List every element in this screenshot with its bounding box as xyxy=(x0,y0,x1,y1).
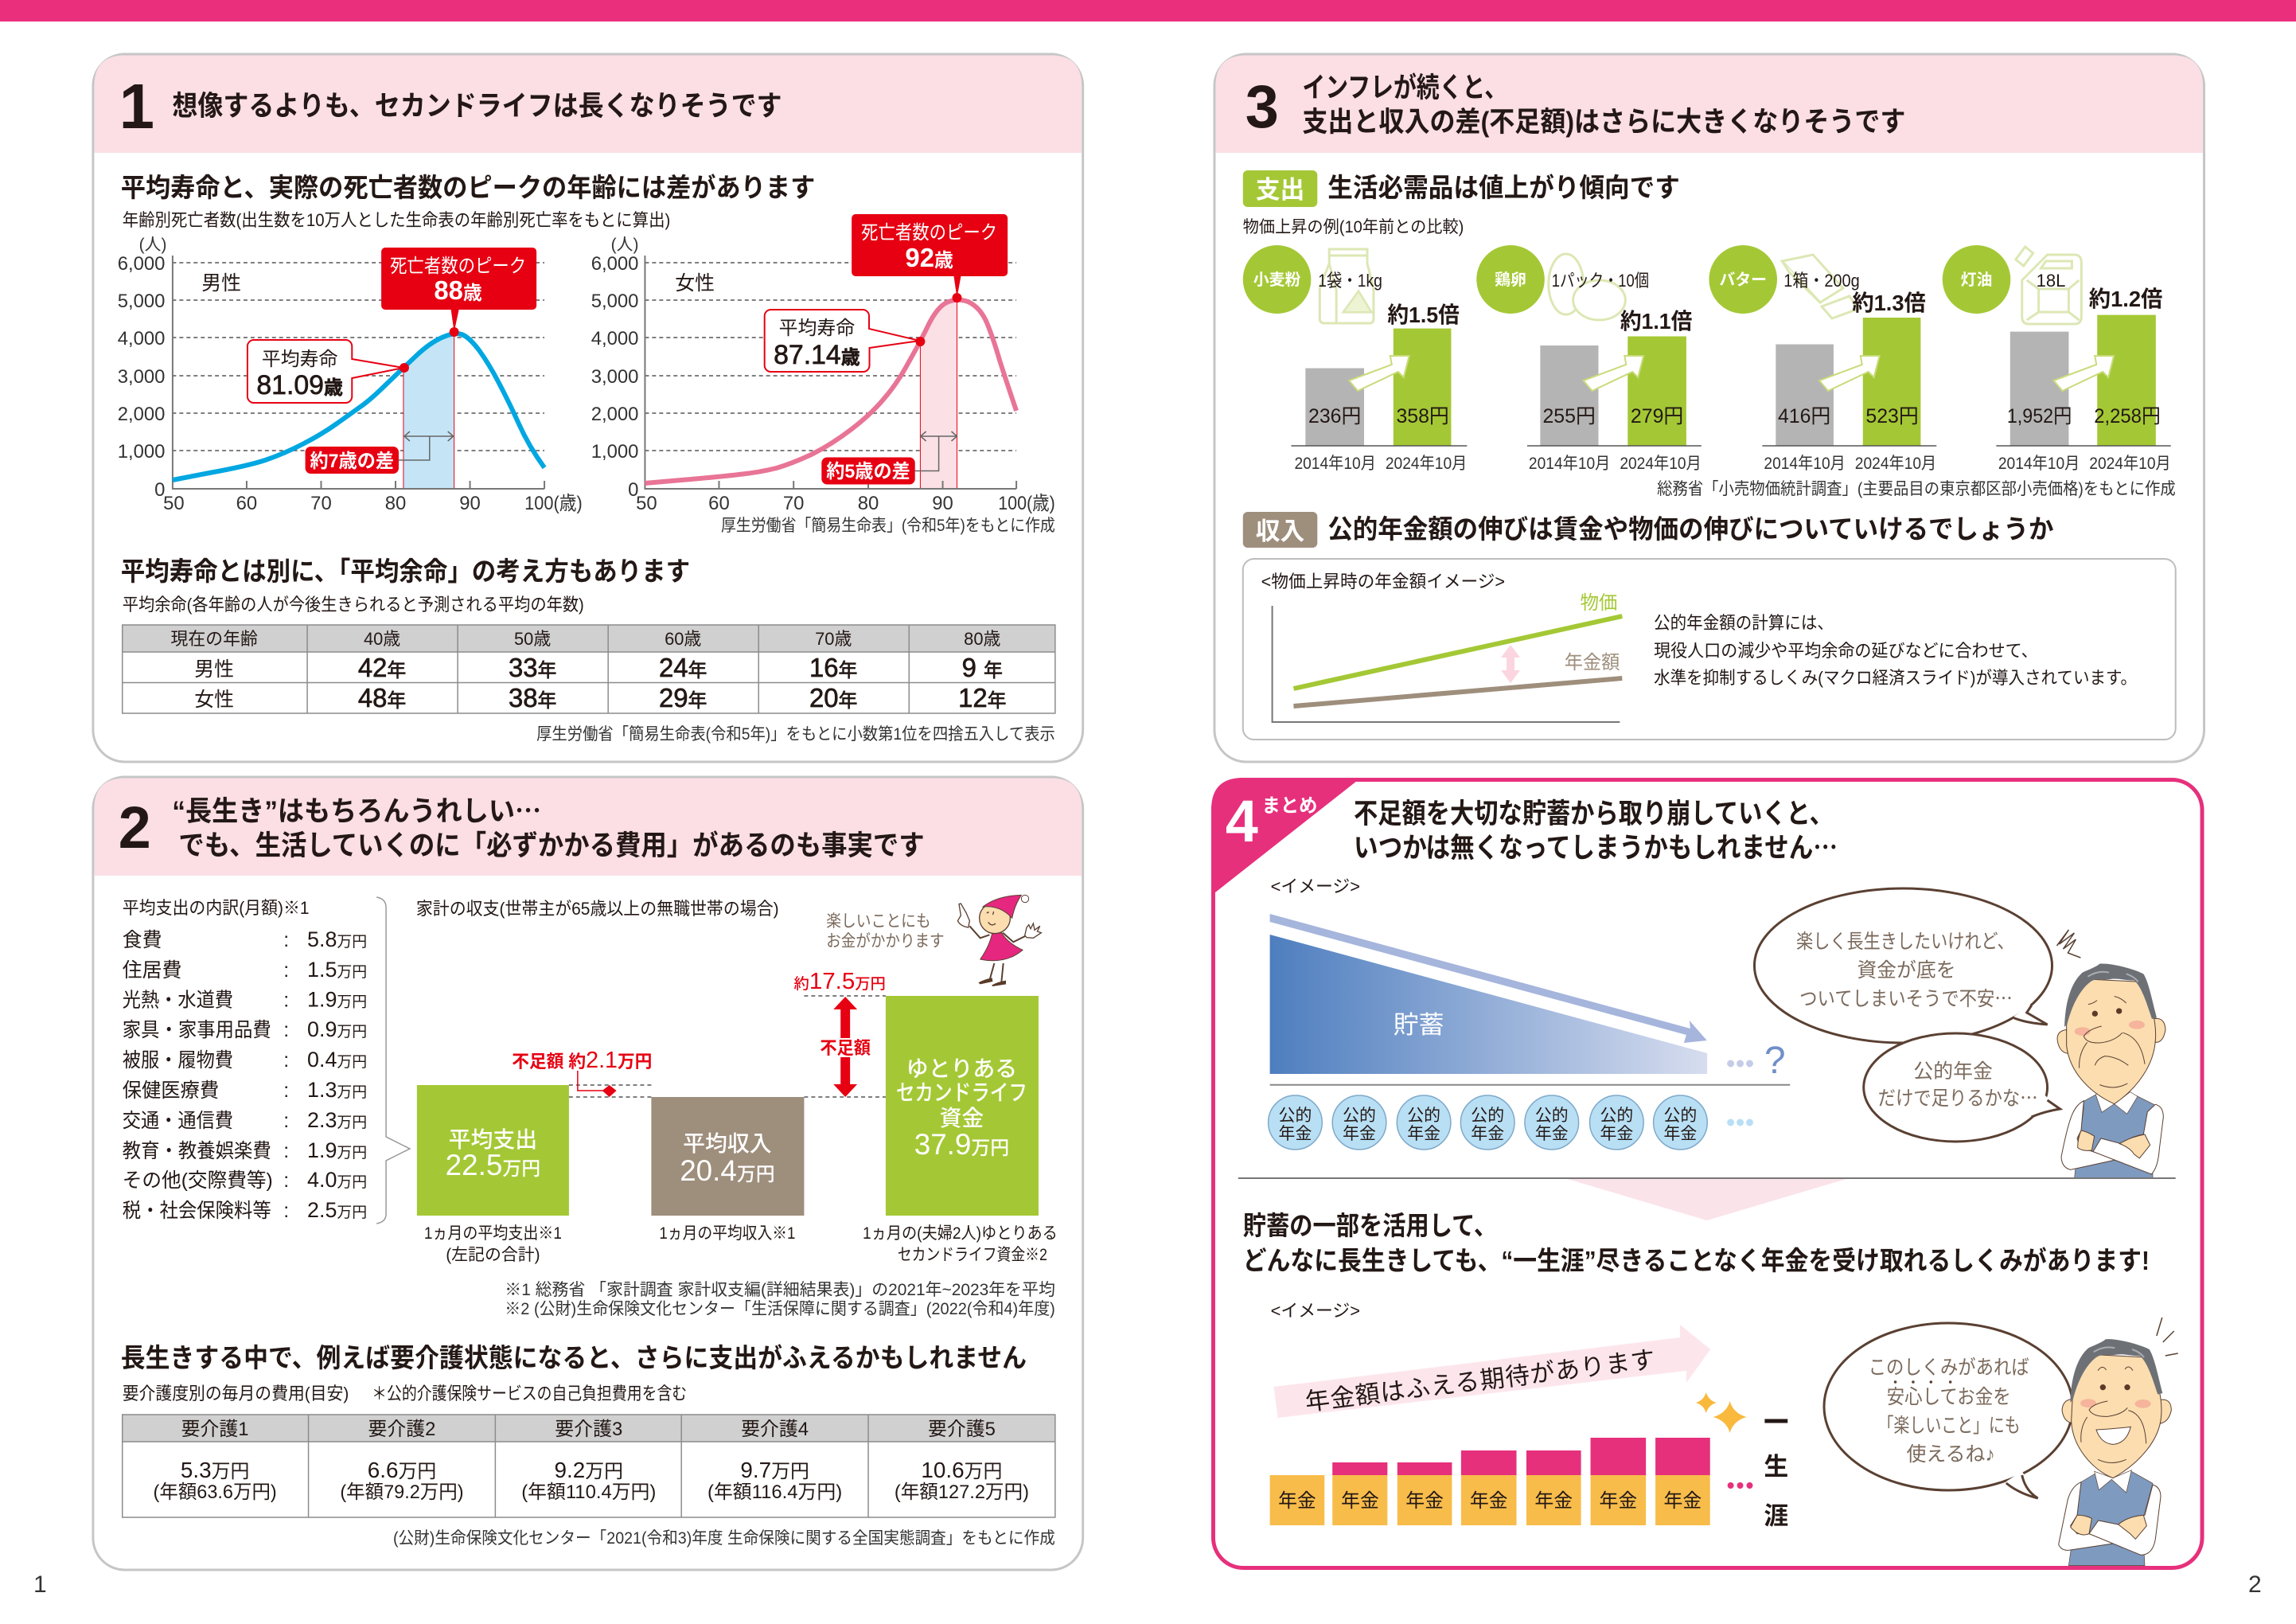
panel 4 title: 不足額を大切な貯蓄から取り崩していくと、 xyxy=(1354,798,1834,830)
item: eggs: 約1.1倍 xyxy=(1620,309,1692,334)
expense breakdown list: 食費 xyxy=(123,929,162,951)
table: remaining years: 50歳 xyxy=(514,629,551,649)
table: nursing care cost: 10.6万円 xyxy=(921,1458,1002,1482)
pension bubbles: 公的 xyxy=(1664,1107,1697,1125)
panel 1 number: 1 xyxy=(119,71,154,142)
panel 2: necessary expenses xyxy=(93,777,1083,1570)
table: nursing care cost: 要介護4 xyxy=(741,1419,809,1440)
heading: nursing care costs: 長生きする中で、例えば要介護状態になると、さらに支出がふえるかもしれません xyxy=(121,1343,1027,1372)
item: kerosene: 灯油 xyxy=(1961,271,1992,289)
callout: male peak 88: 死亡者数のピーク xyxy=(390,256,526,277)
item: wheat flour: 1袋・1kg xyxy=(1318,271,1382,291)
chart: male deaths by age: 3,000 xyxy=(118,366,165,388)
callout: male life expectancy: 81.09歳 xyxy=(256,370,343,400)
vertical label: lifelong xyxy=(1764,1421,1788,1530)
icon: happy man xyxy=(2059,1339,2171,1566)
chart: female deaths by age: 90 xyxy=(932,493,953,514)
expense breakdown list: 0.4万円 xyxy=(307,1048,367,1072)
table: nursing care cost: 5.3万円 xyxy=(181,1458,249,1482)
chart: male deaths by age: 80 xyxy=(385,493,406,514)
callout: about 7 years difference xyxy=(306,431,454,474)
chart: male deaths by age: 男性 xyxy=(201,272,241,295)
chart: female deaths by age: 100(歳) xyxy=(998,493,1055,514)
explanation text: 水準を抑制するしくみ(マクロ経済スライド)が導入されています。 xyxy=(1654,668,2137,688)
corner badge: 4 summary: まとめ xyxy=(1262,795,1317,817)
line chart: prices vs pension: 物価 xyxy=(1581,592,1617,614)
chart: female deaths by age: 60 xyxy=(708,493,730,514)
table: nursing care cost: 6.6万円 xyxy=(368,1458,436,1482)
icon: butter xyxy=(1782,255,1858,318)
explanation text: 公的年金額の計算には、 xyxy=(1654,613,1834,633)
item: eggs: 279円 xyxy=(1631,405,1683,427)
callout: female life expectancy: 平均寿命 xyxy=(779,318,855,339)
expense breakdown list: 5.8万円 xyxy=(307,927,367,951)
callout: female life expectancy: 87.14歳 xyxy=(774,340,860,370)
panel 1 title: 想像するよりも、セカンドライフは長くなりそうです xyxy=(172,91,782,122)
table: remaining years xyxy=(123,625,1055,713)
pension bubbles: 年金 xyxy=(1471,1125,1504,1143)
pension bubbles: 公的 xyxy=(1407,1107,1440,1125)
icon: eggs xyxy=(1549,254,1625,320)
chart: female deaths by age: 50 xyxy=(636,493,657,514)
nursing table subtitle: ＊公的介護保険サービスの自己負担費用を含む xyxy=(372,1384,687,1403)
callout: female peak 92: 死亡者数のピーク xyxy=(861,222,997,244)
panel 3: inflation gap xyxy=(1214,54,2204,762)
chart: female deaths by age: 70 xyxy=(783,493,804,514)
chart: male deaths by age: 50 xyxy=(163,493,185,514)
stacked pension bars: 年金 xyxy=(1599,1490,1637,1512)
badge: spending: 支出 xyxy=(1256,176,1304,204)
bar captions xyxy=(424,1224,1058,1264)
corner badge: 4 summary xyxy=(1211,778,1361,896)
arrow: pension may increase xyxy=(1274,1325,1710,1418)
sub-title: lifelong pension xyxy=(1243,1211,2150,1275)
callout: male life expectancy xyxy=(248,340,409,403)
page number right: 2 xyxy=(2248,1571,2262,1598)
expense breakdown list: : xyxy=(283,1200,289,1222)
table: nursing care cost: (年額63.6万円) xyxy=(154,1482,277,1503)
expense breakdown list: 0.9万円 xyxy=(307,1017,367,1041)
expense breakdown list: 家具・家事用品費 xyxy=(123,1019,271,1041)
expense breakdown list: 1.9万円 xyxy=(307,1138,367,1162)
speech bubble: happy: 「楽しいこと」にも xyxy=(1878,1415,2021,1437)
item: butter: 約1.3倍 xyxy=(1852,291,1926,315)
table: remaining years: 現在の年齢 xyxy=(170,629,258,649)
bar: average income xyxy=(651,1097,804,1216)
table: nursing care cost: 要介護5 xyxy=(928,1419,996,1440)
item: butter: 523円 xyxy=(1865,405,1919,427)
expense breakdown list: 交通・通信費 xyxy=(123,1110,233,1132)
item: butter: 2014年10月 xyxy=(1764,455,1846,473)
item: eggs: 1パック・10個 xyxy=(1552,271,1649,291)
chart: female deaths by age: 女性 xyxy=(675,272,715,295)
table: remaining years: 70歳 xyxy=(815,629,852,649)
expense breakdown list: : xyxy=(283,929,289,951)
panel 4 title xyxy=(1354,798,1838,866)
footnotes xyxy=(505,1281,1055,1318)
panel 2 title xyxy=(172,790,925,861)
table: remaining years: 20年 xyxy=(809,683,857,712)
item: eggs xyxy=(1476,245,1702,473)
expense breakdown list: : xyxy=(283,1110,289,1132)
speech bubble: happy: 使えるね♪ xyxy=(1906,1443,1995,1466)
callout: male peak 88 xyxy=(381,248,536,337)
panel 2 title: “長生き”はもちろんうれしい… xyxy=(172,790,541,830)
panel 3 number: 3 xyxy=(1245,73,1279,141)
item: kerosene: 2,258円 xyxy=(2094,405,2161,427)
item: butter: 1箱・200g xyxy=(1783,271,1860,291)
table: remaining years: 48年 xyxy=(358,683,406,712)
box title: <物価上昇時の年金額イメージ> xyxy=(1261,572,1505,591)
chart: male deaths by age: 70 xyxy=(310,493,332,514)
pension bubbles: 年金 xyxy=(1407,1125,1440,1143)
explanation text xyxy=(1654,613,2137,688)
expense breakdown list: 被服・履物費 xyxy=(123,1049,233,1072)
bar: comfortable second life: ゆとりある xyxy=(906,1056,1017,1081)
table: remaining years: 29年 xyxy=(659,683,707,712)
bar: comfortable second life: セカンドライフ xyxy=(896,1080,1027,1105)
badge: income xyxy=(1243,512,1317,548)
nursing table subtitle: 要介護度別の毎月の費用(目安) xyxy=(123,1384,349,1403)
item: kerosene: 2024年10月 xyxy=(2089,455,2171,473)
icon: sparkles xyxy=(1696,1392,1747,1433)
callout: shortfall 17.5 xyxy=(793,969,886,1097)
bar captions: セカンドライフ資金※2 xyxy=(898,1246,1047,1264)
panel 1: longer second life xyxy=(93,54,1083,762)
item: butter xyxy=(1709,245,1936,473)
item: butter: バター xyxy=(1719,271,1767,289)
panel: pension image box xyxy=(1243,559,2176,740)
pension bubbles: 年金 xyxy=(1600,1125,1633,1143)
icon: girl in pink hat xyxy=(957,895,1041,986)
item: butter: 416円 xyxy=(1778,405,1830,427)
chart source: 厚生労働省「簡易生命表」(令和5年)をもとに作成 xyxy=(721,517,1055,535)
chart subtitle: 年齢別死亡者数(出生数を10万人とした生命表の年齢別死亡率をもとに算出) xyxy=(123,210,670,230)
item: wheat flour: 約1.5倍 xyxy=(1387,303,1460,327)
table: remaining years: 80歳 xyxy=(964,629,1000,649)
table: remaining years: 40歳 xyxy=(364,629,400,649)
callout: female life expectancy xyxy=(765,310,925,372)
chart: male deaths by age: 60 xyxy=(236,493,257,514)
stacked pension bars: 年金 xyxy=(1405,1490,1444,1512)
chart: female deaths by age xyxy=(591,214,1055,514)
stacked pension bars: 年金 xyxy=(1664,1490,1702,1512)
page number left: 1 xyxy=(33,1571,47,1598)
bar captions: 1ヵ月の(夫婦2人)ゆとりある xyxy=(863,1224,1058,1243)
speech: fun costs money too: お金がかかります xyxy=(826,932,945,951)
chart: male deaths by age: 1,000 xyxy=(118,441,165,463)
callout: shortfall 17.5: 約17.5万円 xyxy=(793,969,886,994)
expense breakdown list: : xyxy=(283,1049,289,1072)
item: eggs: 255円 xyxy=(1542,405,1596,427)
table: nursing care cost xyxy=(123,1415,1055,1517)
callout: about 5 years difference xyxy=(821,431,957,484)
icon: worried man xyxy=(2057,964,2165,1178)
callout: about 7 years difference: 約7歳の差 xyxy=(310,451,394,472)
expense breakdown list: : xyxy=(283,1169,289,1192)
pension bubbles: 公的 xyxy=(1343,1107,1376,1125)
corner badge: 4 summary: 4 xyxy=(1226,788,1258,854)
chart: male deaths by age: 90 xyxy=(459,493,481,514)
item: wheat flour: 2024年10月 xyxy=(1386,455,1467,473)
chart: male deaths by age: 0 xyxy=(154,479,165,501)
stacked pension bars: 年金 xyxy=(1470,1490,1508,1512)
expense breakdown list xyxy=(123,898,367,1222)
heading: average remaining years: 平均寿命とは別に、「平均余命」の考え方もあります xyxy=(121,556,690,586)
callout: about 5 years difference: 約5歳の差 xyxy=(826,461,910,482)
divider with pink down arrow xyxy=(1238,1178,2176,1220)
table: nursing care cost: 要介護2 xyxy=(368,1419,435,1440)
line chart: prices vs pension xyxy=(1273,592,1622,722)
table: nursing care cost: (年額110.4万円) xyxy=(521,1482,656,1503)
expense breakdown list: : xyxy=(283,1019,289,1041)
chart: male deaths by age: 100(歳) xyxy=(524,493,583,514)
item: eggs: 2014年10月 xyxy=(1529,455,1610,473)
table: remaining years: 男性 xyxy=(194,658,234,681)
label: image: <イメージ> xyxy=(1271,876,1360,896)
top pink band xyxy=(0,0,2296,21)
expense breakdown list: 1.5万円 xyxy=(307,958,367,982)
item: wheat flour: 小麦粉 xyxy=(1253,271,1300,289)
item: kerosene: 2014年10月 xyxy=(1998,455,2080,473)
stacked pension bars xyxy=(1270,1438,1752,1525)
panel 3 title xyxy=(1302,72,1905,138)
item: eggs: 鶏卵 xyxy=(1495,271,1526,289)
table: nursing care cost: (年額127.2万円) xyxy=(895,1482,1029,1503)
speech bubble: worry xyxy=(1754,888,2052,1043)
panel 2 number: 2 xyxy=(119,794,151,861)
stacked pension bars: 年金 xyxy=(1278,1490,1316,1512)
table: nursing care cost: 9.7万円 xyxy=(740,1458,809,1482)
bar captions: (左記の合計) xyxy=(446,1246,540,1264)
pension bubbles: 公的 xyxy=(1600,1107,1633,1125)
expense breakdown list: 住居費 xyxy=(123,959,181,982)
expense breakdown list: 保健医療費 xyxy=(123,1079,219,1102)
table: remaining years: 24年 xyxy=(659,653,707,682)
pension bubbles: 年金 xyxy=(1343,1125,1376,1143)
expense breakdown list: 教育・教養娯楽費 xyxy=(123,1140,271,1162)
bar: average spending: 平均支出 xyxy=(449,1127,537,1152)
vertical label: lifelong: 涯 xyxy=(1764,1502,1788,1530)
expense breakdown list: 2.3万円 xyxy=(307,1108,367,1132)
badge: income: 収入 xyxy=(1256,517,1304,545)
chart: female deaths by age: 4,000 xyxy=(591,328,638,349)
chart: savings decline: 貯蓄 xyxy=(1394,1011,1444,1039)
table: nursing care cost: 要介護1 xyxy=(181,1419,249,1440)
bracket pointing to bar xyxy=(376,897,410,1224)
table: nursing care cost: 9.2万円 xyxy=(555,1458,623,1482)
chart: male deaths by age: 2,000 xyxy=(118,404,165,425)
expense breakdown list: 光熱・水道費 xyxy=(123,989,233,1012)
item: kerosene: 1,952円 xyxy=(2007,405,2072,427)
bar: comfortable second life: 37.9万円 xyxy=(914,1128,1009,1161)
bar captions: 1ヵ月の平均収入※1 xyxy=(659,1224,795,1243)
expense breakdown list: 2.5万円 xyxy=(307,1198,367,1222)
panel 3 title: 支出と収入の差(不足額)はさらに大きくなりそうです xyxy=(1302,107,1905,138)
icon: worry scribble xyxy=(2056,930,2080,958)
panel 2 title: でも、生活していくのに「必ずかかる費用」があるのも事実です xyxy=(178,830,925,861)
expense breakdown list: その他(交際費等) xyxy=(123,1169,273,1192)
nursing table subtitle xyxy=(123,1384,687,1403)
table: remaining years: 16年 xyxy=(809,653,857,682)
chart: savings decline xyxy=(1270,914,1790,1085)
chart: male deaths by age: 6,000 xyxy=(118,253,165,275)
chart: female deaths by age: 2,000 xyxy=(591,404,638,425)
panel 4: summary xyxy=(1211,778,2202,1568)
table: nursing care cost: (年額79.2万円) xyxy=(340,1482,464,1503)
subtitle: price examples: 物価上昇の例(10年前との比較) xyxy=(1243,218,1464,236)
bar captions: 1ヵ月の平均支出※1 xyxy=(424,1224,562,1243)
chart: female deaths by age: 5,000 xyxy=(591,291,638,312)
table: remaining years: 12年 xyxy=(958,683,1006,712)
icon: surprise lines xyxy=(2157,1318,2178,1356)
expense breakdown list: : xyxy=(283,989,289,1012)
table source: 厚生労働省「簡易生命表(令和5年)」をもとに小数第1位を四捨五入して表示 xyxy=(536,725,1055,744)
expense breakdown list: 1.3万円 xyxy=(307,1078,367,1102)
pension bubbles: 公的 xyxy=(1279,1107,1312,1125)
bar: average spending xyxy=(417,1085,569,1216)
chart: female deaths by age: 80 xyxy=(858,493,879,514)
sub-title: lifelong pension: 貯蓄の一部を活用して、 xyxy=(1243,1211,1497,1240)
speech: fun costs money too xyxy=(826,912,945,951)
callout: female peak 92 xyxy=(852,214,1008,303)
pension bubbles: 年金 xyxy=(1279,1125,1312,1143)
footnotes: ※1 総務省 「家計調査 家計収支編(詳細結果表)」の2021年~2023年を平均 xyxy=(505,1281,1055,1299)
speech bubble: happy: このしくみがあれば xyxy=(1869,1357,2029,1379)
speech bubble: pension enough xyxy=(1864,1033,2060,1142)
pension bubbles: 年金 xyxy=(1535,1125,1569,1143)
nursing table source: (公財)生命保険文化センター「2021(令和3)年度 生命保険に関する全国実態調査」をもとに作成 xyxy=(393,1529,1055,1548)
chart: female deaths by age: 0 xyxy=(628,479,638,501)
stacked pension bars: 年金 xyxy=(1341,1490,1379,1512)
chart: savings decline: ? xyxy=(1764,1040,1786,1082)
chart: male deaths by age xyxy=(118,236,583,514)
table subtitle: 平均余命(各年齢の人が今後生きられると予測される平均の年数) xyxy=(123,595,584,615)
item: kerosene xyxy=(1943,245,2171,473)
table: remaining years: 33年 xyxy=(509,653,556,682)
speech: fun costs money too: 楽しいことにも xyxy=(826,912,931,931)
chart: female deaths by age: 3,000 xyxy=(591,366,638,388)
callout: female peak 92: 92歳 xyxy=(905,243,953,272)
table: remaining years: 60歳 xyxy=(665,629,701,649)
pension bubbles: 公的 xyxy=(1471,1107,1504,1125)
icon: jerry can xyxy=(2016,247,2081,324)
speech bubble: happy xyxy=(1824,1323,2072,1498)
expense breakdown list: 4.0万円 xyxy=(307,1168,367,1192)
label: image 2: <イメージ> xyxy=(1271,1301,1360,1321)
table: remaining years: 9 年 xyxy=(962,653,1003,682)
line chart: prices vs pension: 年金額 xyxy=(1565,652,1620,673)
price source: 総務省「小売物価統計調査」(主要品目の東京都区部小売価格)をもとに作成 xyxy=(1657,480,2176,498)
stacked pension bars: 年金 xyxy=(1534,1490,1573,1512)
table: remaining years: 38年 xyxy=(509,683,556,712)
bar: average spending: 22.5万円 xyxy=(446,1149,540,1181)
bar: comfortable second life xyxy=(886,996,1039,1216)
speech bubble: pension enough: 公的年金 xyxy=(1913,1060,1993,1083)
item: wheat flour xyxy=(1243,245,1467,473)
bar: average income: 平均収入 xyxy=(683,1131,772,1156)
speech bubble: worry: ついてしまいそうで不安… xyxy=(1799,983,2013,1012)
speech bubble: worry: 資金が底を xyxy=(1857,959,1956,982)
chart: female deaths by age: 1,000 xyxy=(591,441,638,463)
table: remaining years: 女性 xyxy=(194,689,234,711)
callout: shortfall 17.5: 不足額 xyxy=(820,1038,871,1058)
expense breakdown list: : xyxy=(283,1079,289,1102)
callout: male peak 88: 88歳 xyxy=(434,275,482,305)
item: wheat flour: 358円 xyxy=(1396,405,1449,427)
speech bubble: happy: 安心してお金を xyxy=(1887,1386,2011,1408)
bar: comfortable second life: 資金 xyxy=(940,1106,984,1130)
pension bubbles: 年金 xyxy=(1664,1125,1697,1143)
chart heading: household budget: 家計の収支(世帯主が65歳以上の無職世帯の場合) xyxy=(416,899,779,919)
arrow: pension may increase: 年金額はふえる期待があります xyxy=(1304,1345,1657,1416)
expense breakdown list: 平均支出の内訳(月額)※1 xyxy=(123,898,310,918)
chart: male deaths by age: 4,000 xyxy=(118,328,165,349)
speech bubble: pension enough: だけで足りるかな… xyxy=(1878,1083,2038,1111)
budget bars xyxy=(417,969,1058,1264)
sub-title: lifelong pension: どんなに長生きしても、“一生涯”尽きることなく年金を受け取れるしくみがあります! xyxy=(1243,1246,2150,1275)
item: kerosene: 約1.2倍 xyxy=(2089,287,2162,311)
heading: can pensions keep up: 公的年金額の伸びは賃金や物価の伸びについていけるでしょうか xyxy=(1327,514,2054,544)
callout: male life expectancy: 平均寿命 xyxy=(262,349,337,370)
pension bubbles: 公的 xyxy=(1535,1107,1569,1125)
table: remaining years: 42年 xyxy=(358,653,406,682)
heading: life expectancy vs peak: 平均寿命と、実際の死亡者数のピークの年齢には差があります xyxy=(121,173,815,202)
chart: male deaths by age: (人) xyxy=(139,236,166,254)
chart: female deaths by age: (人) xyxy=(611,236,638,254)
item: wheat flour: 2014年10月 xyxy=(1294,455,1376,473)
vertical label: lifelong: 生 xyxy=(1764,1453,1788,1481)
chart: male deaths by age: 5,000 xyxy=(118,291,165,312)
table: nursing care cost: (年額116.4万円) xyxy=(708,1482,842,1503)
pension bubbles xyxy=(1269,1095,1753,1150)
table: nursing care cost: 要介護3 xyxy=(555,1419,622,1440)
item: wheat flour: 236円 xyxy=(1308,405,1361,427)
expense breakdown list: 税・社会保険料等 xyxy=(123,1200,271,1222)
expense breakdown list: : xyxy=(283,1140,289,1162)
badge: spending xyxy=(1243,170,1317,207)
explanation text: 現役人口の減少や平均余命の延びなどに合わせて、 xyxy=(1654,641,2038,661)
footnotes: ※2 (公財)生命保険文化センター「生活保障に関する調査」(2022(令和4)年度) xyxy=(505,1300,1055,1318)
panel 3 title: インフレが続くと、 xyxy=(1302,72,1507,103)
expense breakdown list: : xyxy=(283,959,289,982)
item: butter: 2024年10月 xyxy=(1855,455,1936,473)
panel 4 title: いつかは無くなってしまうかもしれません… xyxy=(1354,826,1838,866)
callout: shortfall 2.1: 不足額 約2.1万円 xyxy=(512,1048,652,1073)
item: kerosene: 18L xyxy=(2037,271,2065,291)
chart: female deaths by age: 6,000 xyxy=(591,253,638,275)
speech bubble: worry: 楽しく長生きしたいけれど、 xyxy=(1796,931,2014,953)
heading: necessities rising: 生活必需品は値上がり傾向です xyxy=(1327,173,1680,202)
bar: average income: 20.4万円 xyxy=(680,1154,775,1187)
expense breakdown list: 1.9万円 xyxy=(307,987,367,1012)
callout: shortfall 2.1 xyxy=(512,1048,652,1097)
item: eggs: 2024年10月 xyxy=(1620,455,1702,473)
icon: flour bag xyxy=(1320,249,1374,323)
